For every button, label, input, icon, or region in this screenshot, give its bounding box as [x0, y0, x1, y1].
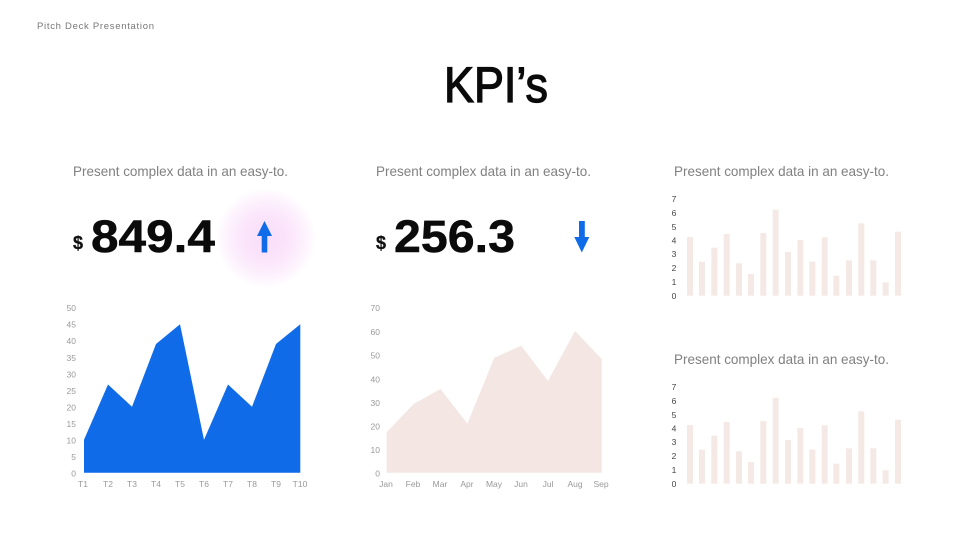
- currency symbol: $: [73, 233, 83, 253]
- y axis labels: 0: [375, 468, 380, 478]
- x axis labels: T8: [247, 479, 257, 489]
- y axis labels: 7: [672, 194, 677, 204]
- panel 4 subtitle: Present complex data in an easy-to.: [674, 351, 889, 367]
- y axis labels: [67, 303, 76, 478]
- currency symbol: $: [376, 233, 386, 253]
- x axis labels: T4: [151, 479, 161, 489]
- y axis labels: [371, 303, 380, 478]
- panel: top bar chart: [672, 163, 901, 301]
- pink glow: [216, 188, 316, 288]
- y axis labels: 5: [672, 410, 677, 420]
- y axis labels: 7: [672, 382, 677, 392]
- y axis labels: 40: [67, 336, 76, 346]
- panel: KPI 849.4: [67, 163, 316, 489]
- x axis labels: Feb: [406, 479, 421, 489]
- x axis labels: Jan: [379, 479, 393, 489]
- header label: Pitch Deck Presentation: [37, 21, 154, 32]
- blue area: [84, 324, 300, 473]
- panel: KPI 256.3: [371, 163, 609, 489]
- y axis labels: 45: [67, 320, 76, 330]
- x axis labels: T1: [78, 479, 88, 489]
- x axis labels: Jul: [543, 479, 554, 489]
- y axis labels: 60: [371, 327, 380, 337]
- x axis labels: Apr: [460, 479, 474, 489]
- bars: [687, 398, 901, 484]
- y axis labels: 0: [672, 479, 677, 489]
- y axis labels: 20: [371, 422, 380, 432]
- y axis labels: 4: [672, 424, 677, 434]
- area chart: T1-T10: [67, 303, 308, 489]
- y axis labels: 50: [67, 303, 76, 313]
- x axis labels: May: [486, 479, 503, 489]
- x axis labels: T10: [293, 479, 308, 489]
- icon: up arrow: [257, 221, 272, 252]
- y axis labels: 0: [672, 291, 677, 301]
- y axis labels: 30: [371, 398, 380, 408]
- y axis labels: 3: [672, 249, 677, 259]
- x axis labels: [78, 479, 308, 489]
- y axis labels: 5: [672, 222, 677, 232]
- x axis labels: T9: [271, 479, 281, 489]
- y axis labels: 30: [67, 370, 76, 380]
- x axis labels: Aug: [567, 479, 583, 489]
- y axis labels: 70: [371, 303, 380, 313]
- x axis labels: Sep: [593, 479, 609, 489]
- y axis labels: 2: [672, 263, 677, 273]
- icon: down arrow: [574, 221, 589, 252]
- x axis labels: T6: [199, 479, 209, 489]
- y axis labels: 3: [672, 437, 677, 447]
- y axis labels: 0: [71, 468, 76, 478]
- y axis labels: 1: [672, 465, 677, 475]
- x axis labels: T5: [175, 479, 185, 489]
- y axis labels: 2: [672, 451, 677, 461]
- y axis labels: 1: [672, 277, 677, 287]
- area chart: Jan-Sep: [371, 303, 609, 489]
- panel: bottom bar chart: [672, 351, 901, 489]
- x axis labels: Jun: [514, 479, 528, 489]
- y axis labels: 4: [672, 236, 677, 246]
- x axis labels: T7: [223, 479, 233, 489]
- y axis labels: 5: [71, 452, 76, 462]
- x axis labels: T2: [103, 479, 113, 489]
- y axis labels: 35: [67, 353, 76, 363]
- y axis labels: 40: [371, 374, 380, 384]
- value 256.3: 256.3: [394, 211, 515, 262]
- bars: [687, 210, 901, 296]
- y axis labels: 20: [67, 402, 76, 412]
- panel 3 subtitle: Present complex data in an easy-to.: [674, 163, 889, 179]
- y axis labels: 15: [67, 419, 76, 429]
- x axis labels: [379, 479, 609, 489]
- y axis labels: 10: [371, 445, 380, 455]
- panel 2 subtitle: Present complex data in an easy-to.: [376, 163, 591, 179]
- y axis labels: [672, 382, 677, 489]
- y axis labels: 6: [672, 396, 677, 406]
- value 849.4: 849.4: [91, 211, 215, 262]
- panel 1 subtitle: Present complex data in an easy-to.: [73, 163, 288, 179]
- pink area: [387, 331, 602, 473]
- y axis labels: 6: [672, 208, 677, 218]
- y axis labels: 25: [67, 386, 76, 396]
- y axis labels: [672, 194, 677, 301]
- y axis labels: 10: [67, 436, 76, 446]
- x axis labels: T3: [127, 479, 137, 489]
- y axis labels: 50: [371, 350, 380, 360]
- title: KPI’s: [444, 57, 548, 113]
- x axis labels: Mar: [433, 479, 447, 489]
